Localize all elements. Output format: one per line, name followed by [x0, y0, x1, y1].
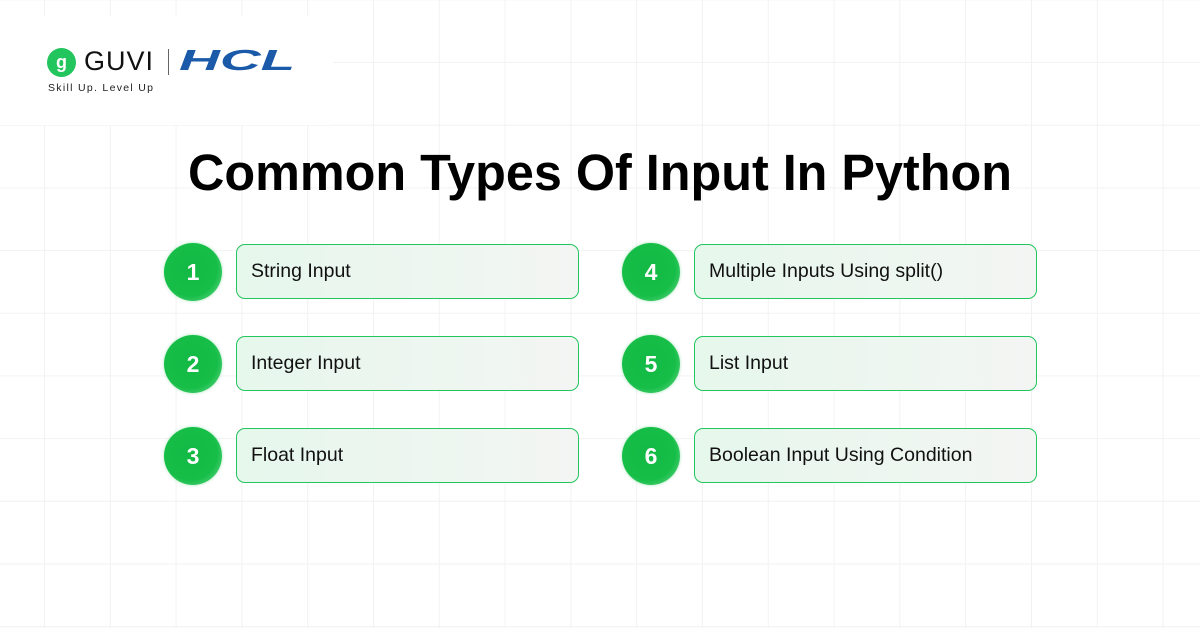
item 4: Multiple Inputs Using split() — [709, 260, 943, 282]
item 2 — [162, 333, 579, 395]
item 5: List Input — [709, 352, 788, 374]
guvi wordmark: GUVI — [84, 46, 154, 76]
item 3 — [162, 425, 579, 487]
logo — [47, 45, 295, 94]
item 1: 1 — [187, 258, 199, 284]
icon: guvi — [47, 48, 76, 77]
item 6 — [620, 425, 1037, 487]
item 6: Boolean Input Using Condition — [709, 444, 972, 466]
item 1: String Input — [251, 260, 351, 282]
tagline: Skill Up. Level Up — [48, 82, 154, 94]
logo: HCL — [179, 45, 295, 77]
icon: guvi: g — [56, 52, 67, 72]
item 3: Float Input — [251, 444, 343, 466]
item 5 — [620, 333, 1037, 395]
item 6: 6 — [645, 442, 657, 468]
item 4 — [620, 241, 1037, 303]
item 1 — [162, 241, 579, 303]
item 4: 4 — [645, 258, 657, 284]
item 2: 2 — [187, 350, 199, 376]
item 5: 5 — [645, 350, 657, 376]
hcl wordmark — [168, 49, 169, 75]
item 2: Integer Input — [251, 352, 360, 374]
item 3: 3 — [187, 442, 199, 468]
title: Common Types Of Input In Python — [188, 144, 1012, 201]
